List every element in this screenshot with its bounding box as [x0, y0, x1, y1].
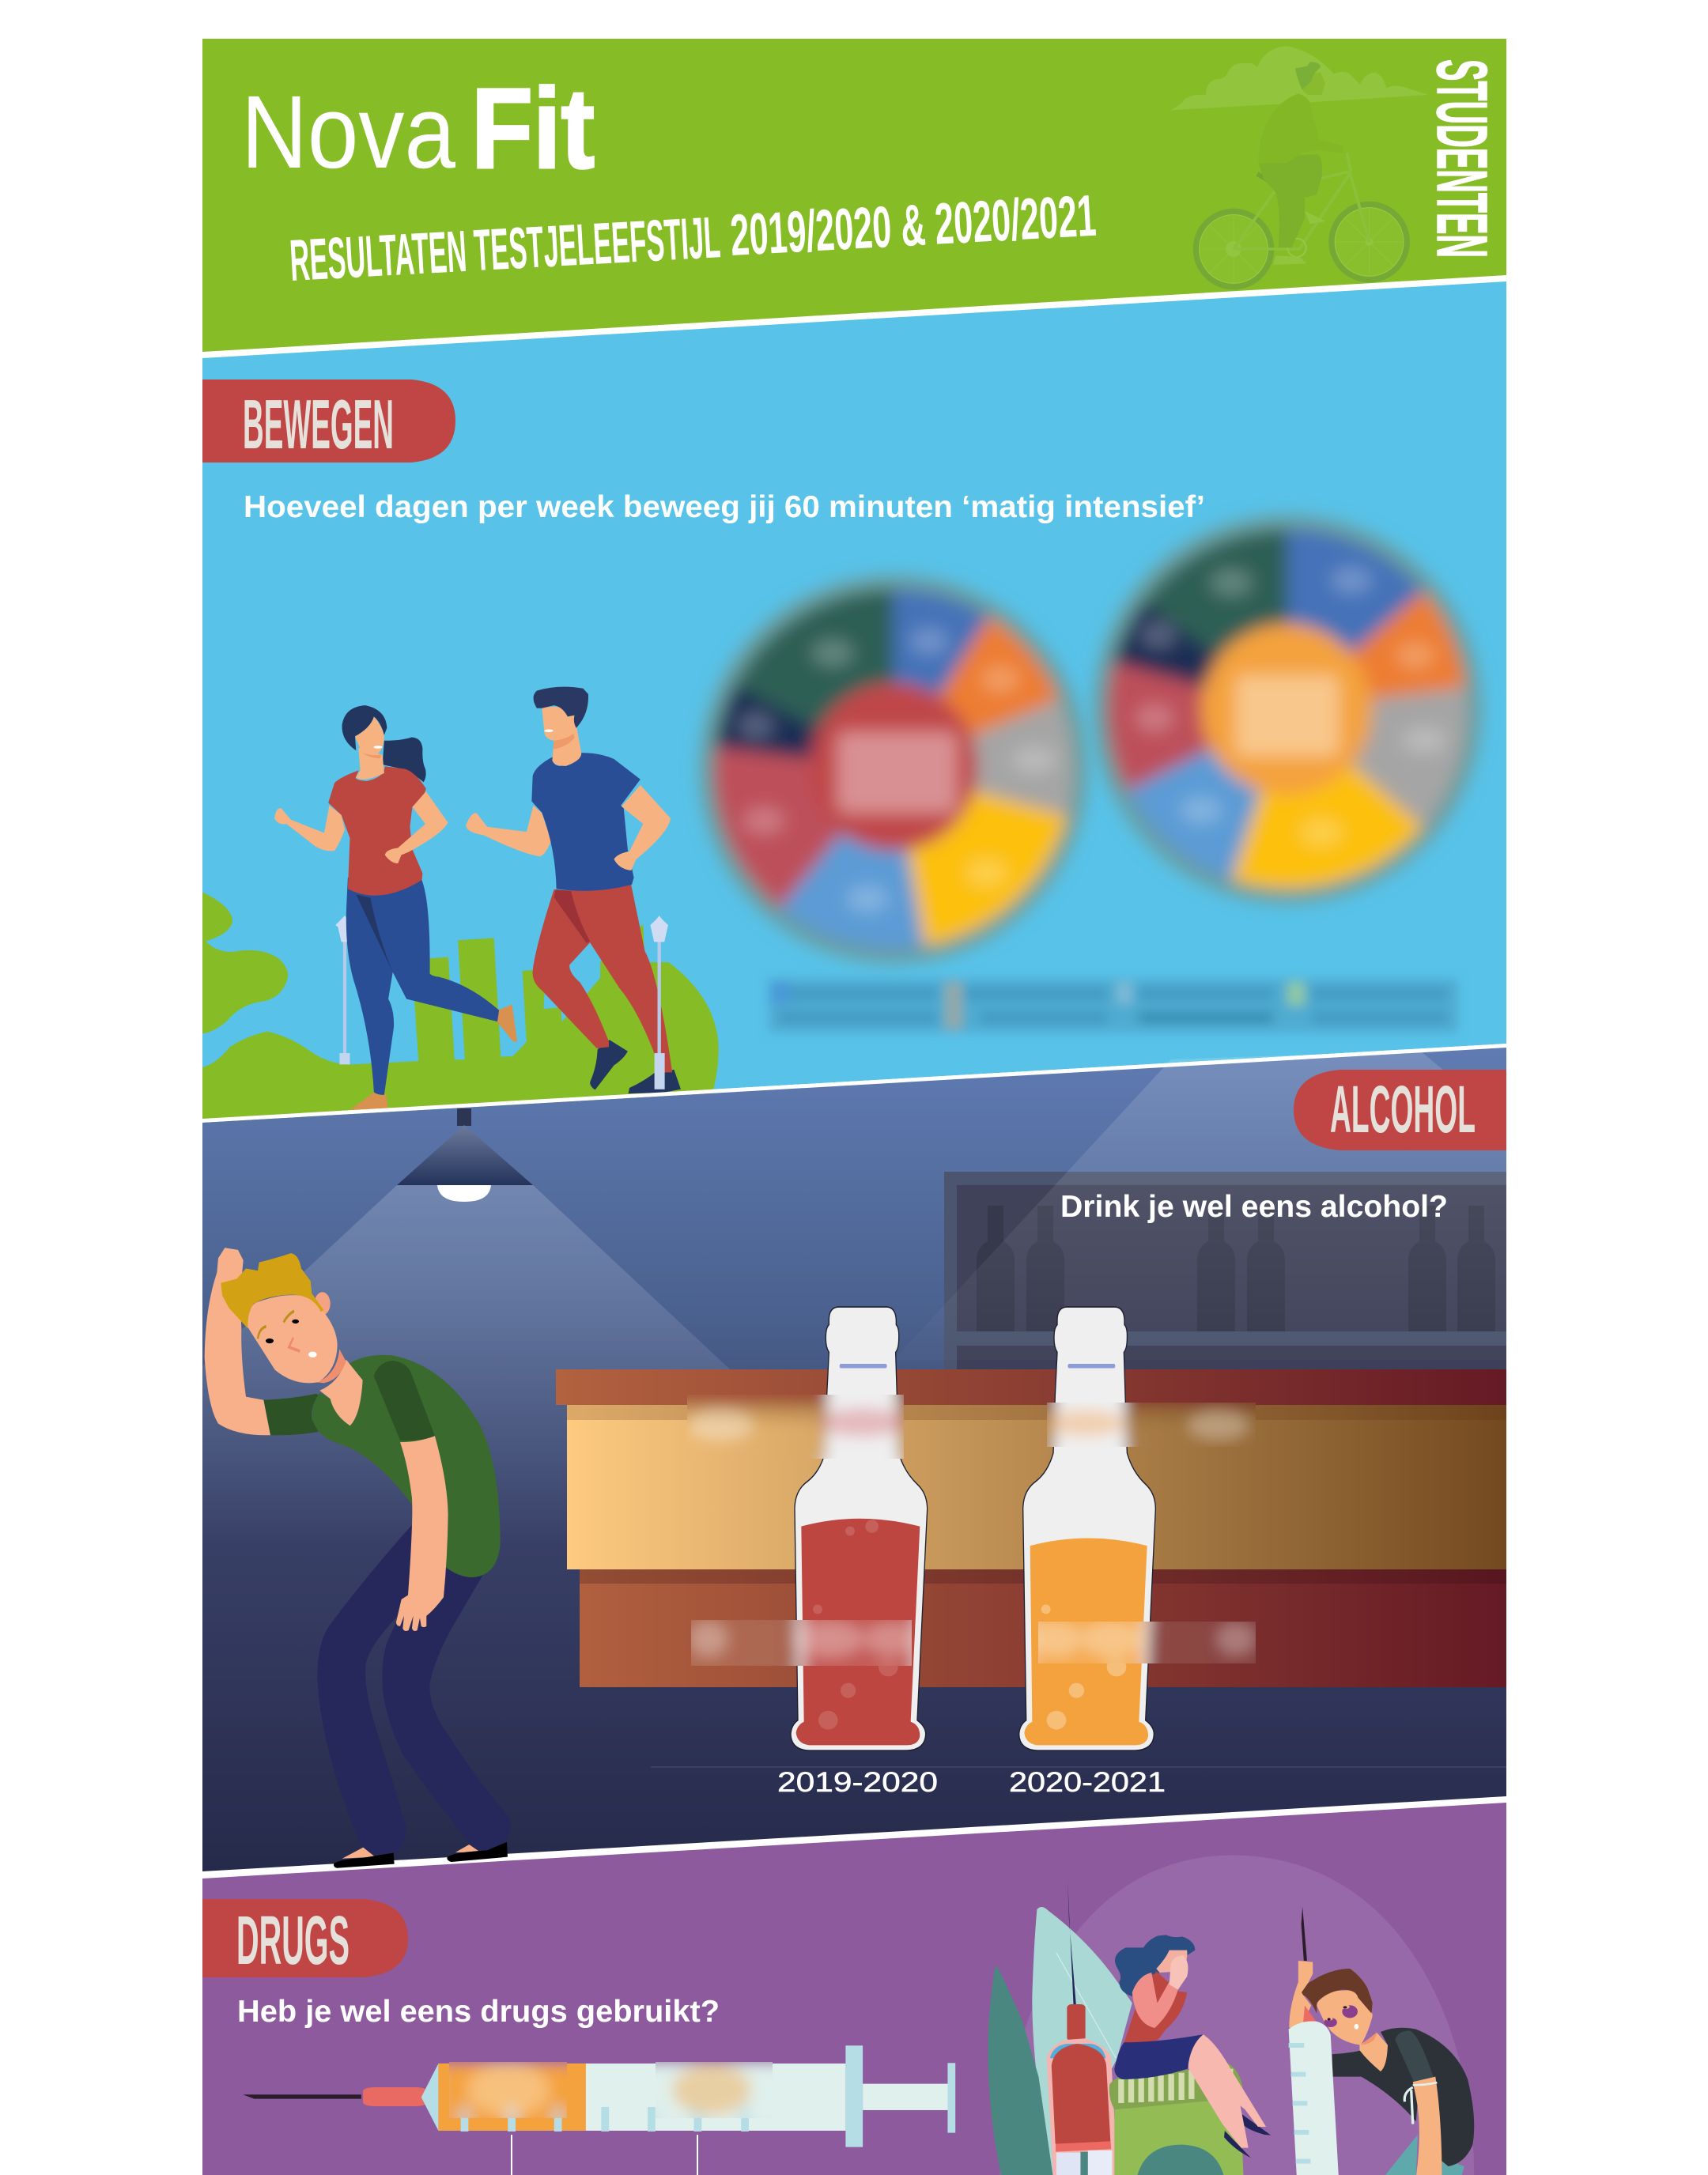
heading pill: alcohol: ALCOHOL [1330, 1072, 1476, 1146]
light cone right [894, 1051, 1506, 1360]
blurred label 2020-2021 bottom [1038, 1622, 1256, 1663]
blurred label 2020-2021 top [1047, 1403, 1256, 1447]
icon: ceiling lamp [397, 1108, 533, 1202]
title: RESULTATEN TESTJELEEFSTIJL [288, 204, 722, 293]
shelf with bottles [944, 1172, 1506, 1373]
blurred label 2019-2020 bottom [691, 1620, 912, 1666]
heading pill: drugs [202, 1899, 408, 1979]
icon: street lamp right [650, 916, 668, 1089]
icon: street lamp left [335, 916, 352, 1064]
icon: syringe [243, 2045, 955, 2147]
heading pill: bewegen [202, 379, 455, 463]
light cone lamp [202, 1185, 917, 1550]
leader lines [511, 2135, 698, 2175]
icon: bottle 2019-2020 [791, 1307, 928, 1750]
heading pill: alcohol [1294, 1070, 1506, 1150]
floor line [651, 1766, 1506, 1768]
legend (blurred) [769, 979, 1458, 1033]
panel: header: STUDENTEN [1422, 59, 1501, 258]
blurred label syringe left [449, 2062, 567, 2118]
logo: NovaFit [241, 65, 595, 192]
icon: bottle 2020-2021 [1019, 1307, 1155, 1750]
panel: alcohol [202, 1048, 1506, 1871]
park background [202, 893, 719, 1123]
question: alcohol: Drink je wel eens alcohol? [1060, 1190, 1448, 1224]
panel: bewegen [202, 281, 1506, 1123]
figure: running woman [274, 705, 517, 1110]
panel: header [202, 39, 1506, 352]
title: 2019/2020 & 2020/2021 [728, 183, 1098, 268]
pie chart 2020-2021 [1094, 515, 1481, 903]
pie chart 2019-2020 [700, 576, 1087, 963]
logo: NovaFit: Fit [471, 65, 595, 192]
logo: NovaFit: Nova [241, 74, 455, 190]
panel: drugs [202, 1803, 1506, 2175]
question: bewegen: Hoeveel dagen per week beweeg jij 60 minuten ‘matig intensief’ [244, 490, 1205, 524]
icon: cyclist with cloud [1170, 46, 1429, 287]
blurred label 2019-2020 top [687, 1395, 904, 1459]
label: 2020-2021: 2020-2021 [1009, 1767, 1166, 1798]
bar counter [556, 1369, 1506, 1687]
heading pill: bewegen: BEWEGEN [243, 385, 394, 463]
question: drugs: Heb je wel eens drugs gebruikt? [237, 1995, 720, 2029]
heading pill: drugs: DRUGS [236, 1902, 350, 1979]
label: 2019-2020: 2019-2020 [777, 1767, 938, 1798]
illustration: people with syringes [988, 1856, 1474, 2175]
figure: running man [466, 687, 681, 1093]
blurred label syringe right [656, 2062, 773, 2118]
figure: drunk man [205, 1248, 510, 1868]
